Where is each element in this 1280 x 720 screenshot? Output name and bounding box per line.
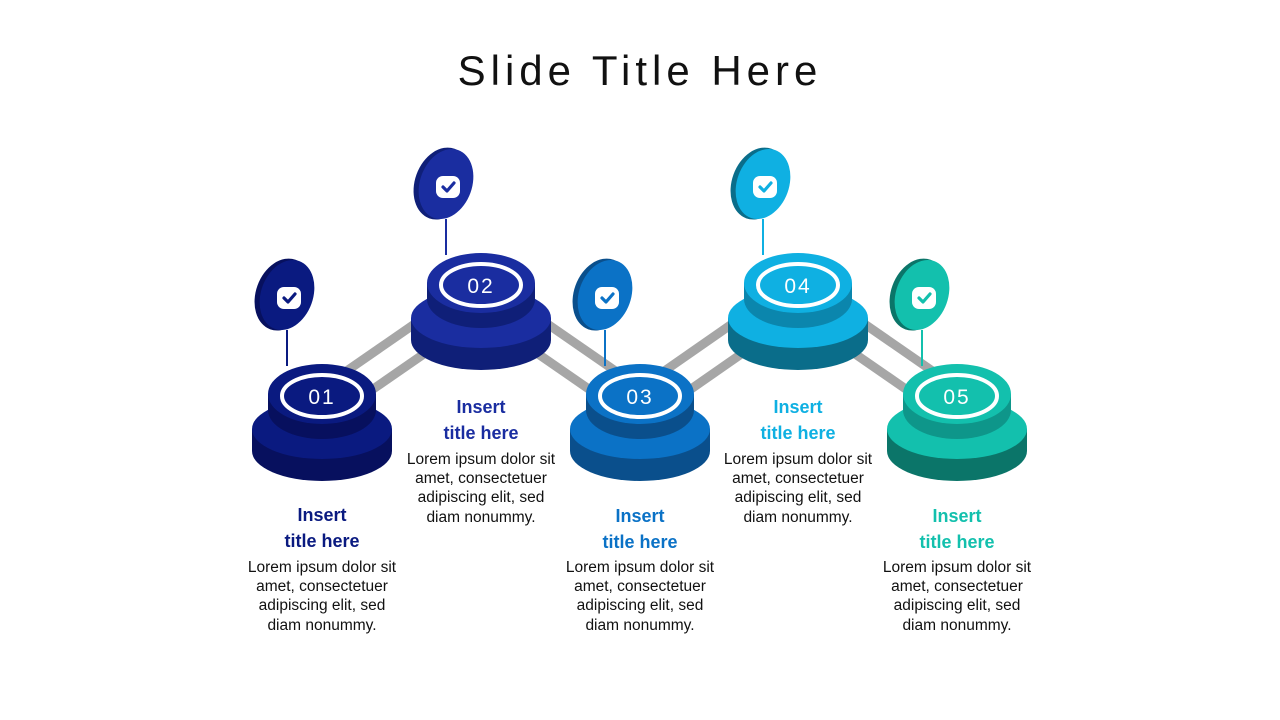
text block 01: diam nonummy. bbox=[267, 617, 377, 634]
node 01: 01 bbox=[308, 386, 336, 409]
text block 02 bbox=[407, 397, 556, 526]
text block 02: adipiscing elit, sed bbox=[418, 489, 544, 506]
node 01 bbox=[245, 251, 392, 481]
text block 01: Lorem ipsum dolor sit bbox=[248, 559, 397, 576]
node 02 bbox=[404, 140, 551, 370]
text block 04: amet, consectetuer bbox=[732, 470, 864, 487]
node 05: 05 bbox=[943, 386, 971, 409]
text block 03: Insert bbox=[615, 506, 665, 526]
text block 01: adipiscing elit, sed bbox=[259, 597, 385, 614]
text block 04: adipiscing elit, sed bbox=[735, 489, 861, 506]
text block 03 bbox=[566, 506, 715, 634]
text block 05: adipiscing elit, sed bbox=[894, 597, 1020, 614]
text block 02: diam nonummy. bbox=[426, 509, 536, 526]
node 04 bbox=[721, 140, 868, 370]
connectors bbox=[322, 278, 957, 412]
node 03 bbox=[563, 251, 710, 481]
text block 03: diam nonummy. bbox=[585, 617, 695, 634]
text block 02: amet, consectetuer bbox=[415, 470, 547, 487]
text block 04: title here bbox=[760, 423, 836, 443]
text block 02: Insert bbox=[456, 397, 506, 417]
text block 01: Insert bbox=[297, 505, 347, 525]
text block 04: diam nonummy. bbox=[743, 509, 853, 526]
text block 01 bbox=[248, 505, 397, 634]
text block 05: title here bbox=[919, 532, 995, 552]
text block 05 bbox=[883, 506, 1032, 634]
node 03: 03 bbox=[626, 386, 654, 409]
text block 03: title here bbox=[602, 532, 678, 552]
text block 05: amet, consectetuer bbox=[891, 578, 1023, 595]
text block 03: amet, consectetuer bbox=[574, 578, 706, 595]
node 04: 04 bbox=[784, 275, 812, 298]
text block 04: Lorem ipsum dolor sit bbox=[724, 451, 873, 468]
node 05 bbox=[880, 251, 1027, 481]
text block 01: amet, consectetuer bbox=[256, 578, 388, 595]
text block 02: Lorem ipsum dolor sit bbox=[407, 451, 556, 468]
text block 05: diam nonummy. bbox=[902, 617, 1012, 634]
text block 03: Lorem ipsum dolor sit bbox=[566, 559, 715, 576]
text block 04: Insert bbox=[773, 397, 823, 417]
text block 03: adipiscing elit, sed bbox=[577, 597, 703, 614]
text block 01: title here bbox=[284, 531, 360, 551]
node 02: 02 bbox=[467, 275, 495, 298]
text block 05: Lorem ipsum dolor sit bbox=[883, 559, 1032, 576]
title: Slide Title Here bbox=[458, 47, 822, 94]
text block 05: Insert bbox=[932, 506, 982, 526]
text block 02: title here bbox=[443, 423, 519, 443]
text block 04 bbox=[724, 397, 873, 526]
